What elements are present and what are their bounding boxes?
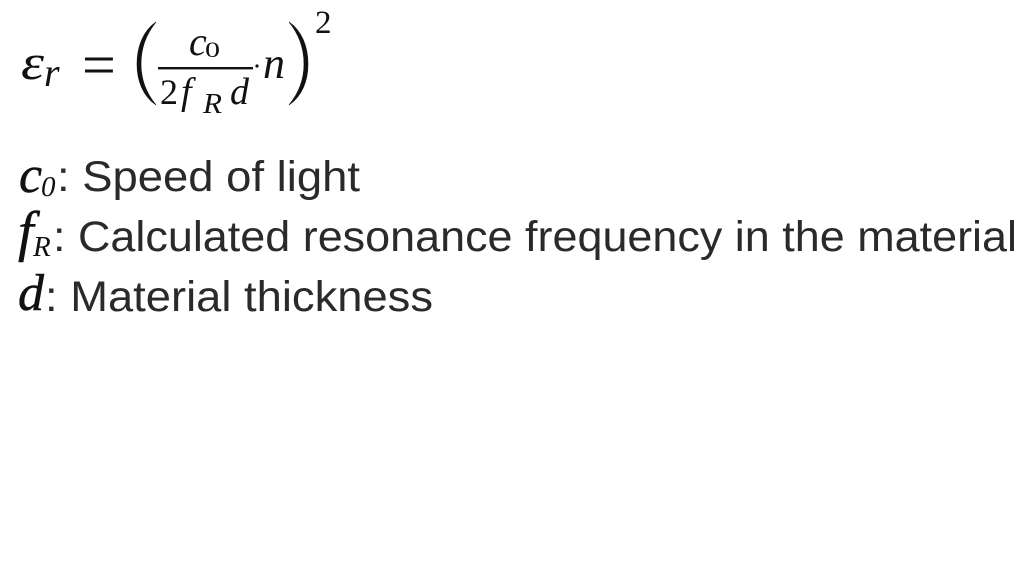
legend: speed of light: c: [19, 147, 42, 204]
equals sign: =: [82, 32, 116, 98]
multiplication dot and n: n: [263, 39, 285, 88]
epsilon r symbol: ε: [21, 34, 44, 90]
fraction: 2: [160, 72, 178, 112]
fraction: 0: [205, 37, 220, 62]
epsilon r symbol: r: [44, 50, 60, 95]
right parenthesis: [289, 22, 308, 105]
legend: material thickness: : Material thickness: [45, 273, 433, 321]
legend: resonance frequency: : Calculated resonance frequency in the material: [53, 213, 1017, 261]
formula: relative permittivity equation: [21, 5, 332, 120]
fraction: c: [189, 19, 207, 64]
legend: resonance frequency: R: [32, 231, 51, 263]
fraction: [158, 19, 253, 120]
left parenthesis: [137, 22, 156, 105]
fraction: f: [181, 71, 196, 113]
legend: speed of light: 0: [41, 171, 56, 203]
fraction: d: [230, 71, 250, 113]
fraction: R: [202, 89, 222, 120]
legend: speed of light: : Speed of light: [57, 153, 360, 201]
epsilon r symbol: [21, 34, 60, 95]
legend: resonance frequency: f: [18, 201, 41, 263]
exponent 2: 2: [315, 5, 332, 41]
legend: material thickness: d: [18, 265, 45, 322]
